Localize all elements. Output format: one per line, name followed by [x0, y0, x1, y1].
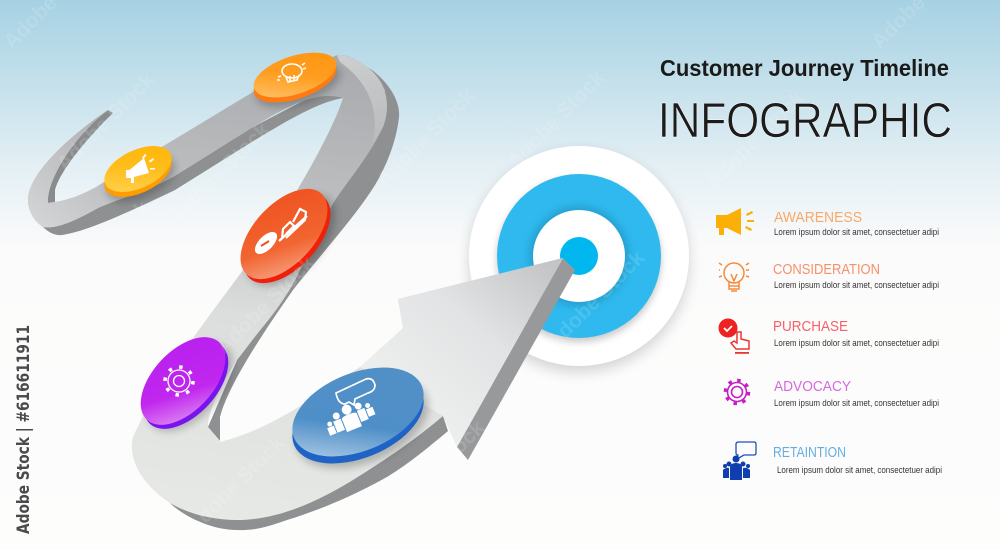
- watermarks: Adobe Stock: [872, 241, 980, 349]
- label: PURCHASE: [773, 318, 848, 335]
- watermarks: Adobe Stock: [382, 416, 490, 524]
- icon: megaphone: [716, 208, 754, 235]
- disc: advocacy: [125, 322, 249, 447]
- title: Customer Journey Timeline: [660, 55, 949, 81]
- stock id label: Adobe Stock | #616611911: [14, 325, 34, 534]
- label: RETAINTION: [773, 444, 846, 461]
- watermarks: Adobe Stock: [717, 436, 825, 544]
- side: bend and descent: [208, 67, 399, 441]
- watermarks: Adobe Stock: [17, 406, 125, 514]
- list item: purchase: [718, 318, 939, 354]
- list item: awareness: [716, 208, 939, 237]
- disc: awareness: [97, 137, 183, 212]
- tail highlight: [28, 110, 108, 227]
- side: bottom curve: [170, 416, 448, 530]
- target: [469, 146, 689, 372]
- ribbon top face: [28, 55, 563, 520]
- watermarks: Adobe Stock: [212, 251, 320, 359]
- icon: team with speech bubble: [723, 442, 756, 480]
- icon: check and hand: [718, 318, 749, 354]
- icon: gear: [726, 380, 748, 404]
- side: tail and first diagonal: [43, 90, 343, 235]
- description: Lorem ipsum dolor sit amet, consectetuer adipi: [774, 398, 939, 408]
- watermarks: Adobe Stock: [52, 68, 160, 176]
- icon: gear: [165, 367, 193, 395]
- disc: retention: [279, 350, 442, 486]
- disc: consideration: [248, 44, 346, 117]
- icon: hand with check: [251, 209, 307, 258]
- side: arrow head: [457, 258, 575, 460]
- journey arrow ribbon: [28, 55, 575, 530]
- watermarks: Adobe Stock: [182, 431, 290, 539]
- description: Lorem ipsum dolor sit amet, consectetuer adipi: [777, 465, 942, 475]
- description: Lorem ipsum dolor sit amet, consectetuer adipi: [774, 280, 939, 290]
- bend highlight: [337, 55, 387, 145]
- icon: team with speech bubble: [322, 379, 378, 438]
- arrow head: [360, 258, 563, 447]
- disc: purchase: [225, 173, 352, 302]
- icon: megaphone: [126, 154, 155, 183]
- watermarks: Adobe Stock: [47, 196, 155, 304]
- icon: bulb: [277, 63, 306, 82]
- tail inner side: [48, 110, 113, 203]
- icon: bulb: [719, 263, 749, 291]
- watermarks: Adobe Stock: [667, 296, 775, 404]
- description: Lorem ipsum dolor sit amet, consectetuer adipi: [774, 227, 939, 237]
- list item: consideration: [719, 261, 939, 291]
- list item: retention: [723, 442, 942, 480]
- label: ADVOCACY: [774, 378, 851, 395]
- label: AWARENESS: [774, 209, 862, 226]
- watermarks: Adobe Stock: [542, 246, 650, 354]
- list item: advocacy: [726, 378, 939, 408]
- watermarks: Adobe Stock: [372, 84, 480, 192]
- heading: infographic: INFOGRAPHIC: [658, 94, 952, 148]
- label: CONSIDERATION: [773, 261, 880, 278]
- watermarks: Adobe Stock: [702, 86, 810, 194]
- description: Lorem ipsum dolor sit amet, consectetuer adipi: [774, 338, 939, 348]
- watermarks: Adobe Stock: [502, 66, 610, 174]
- watermarks: Adobe Stock: [167, 118, 275, 226]
